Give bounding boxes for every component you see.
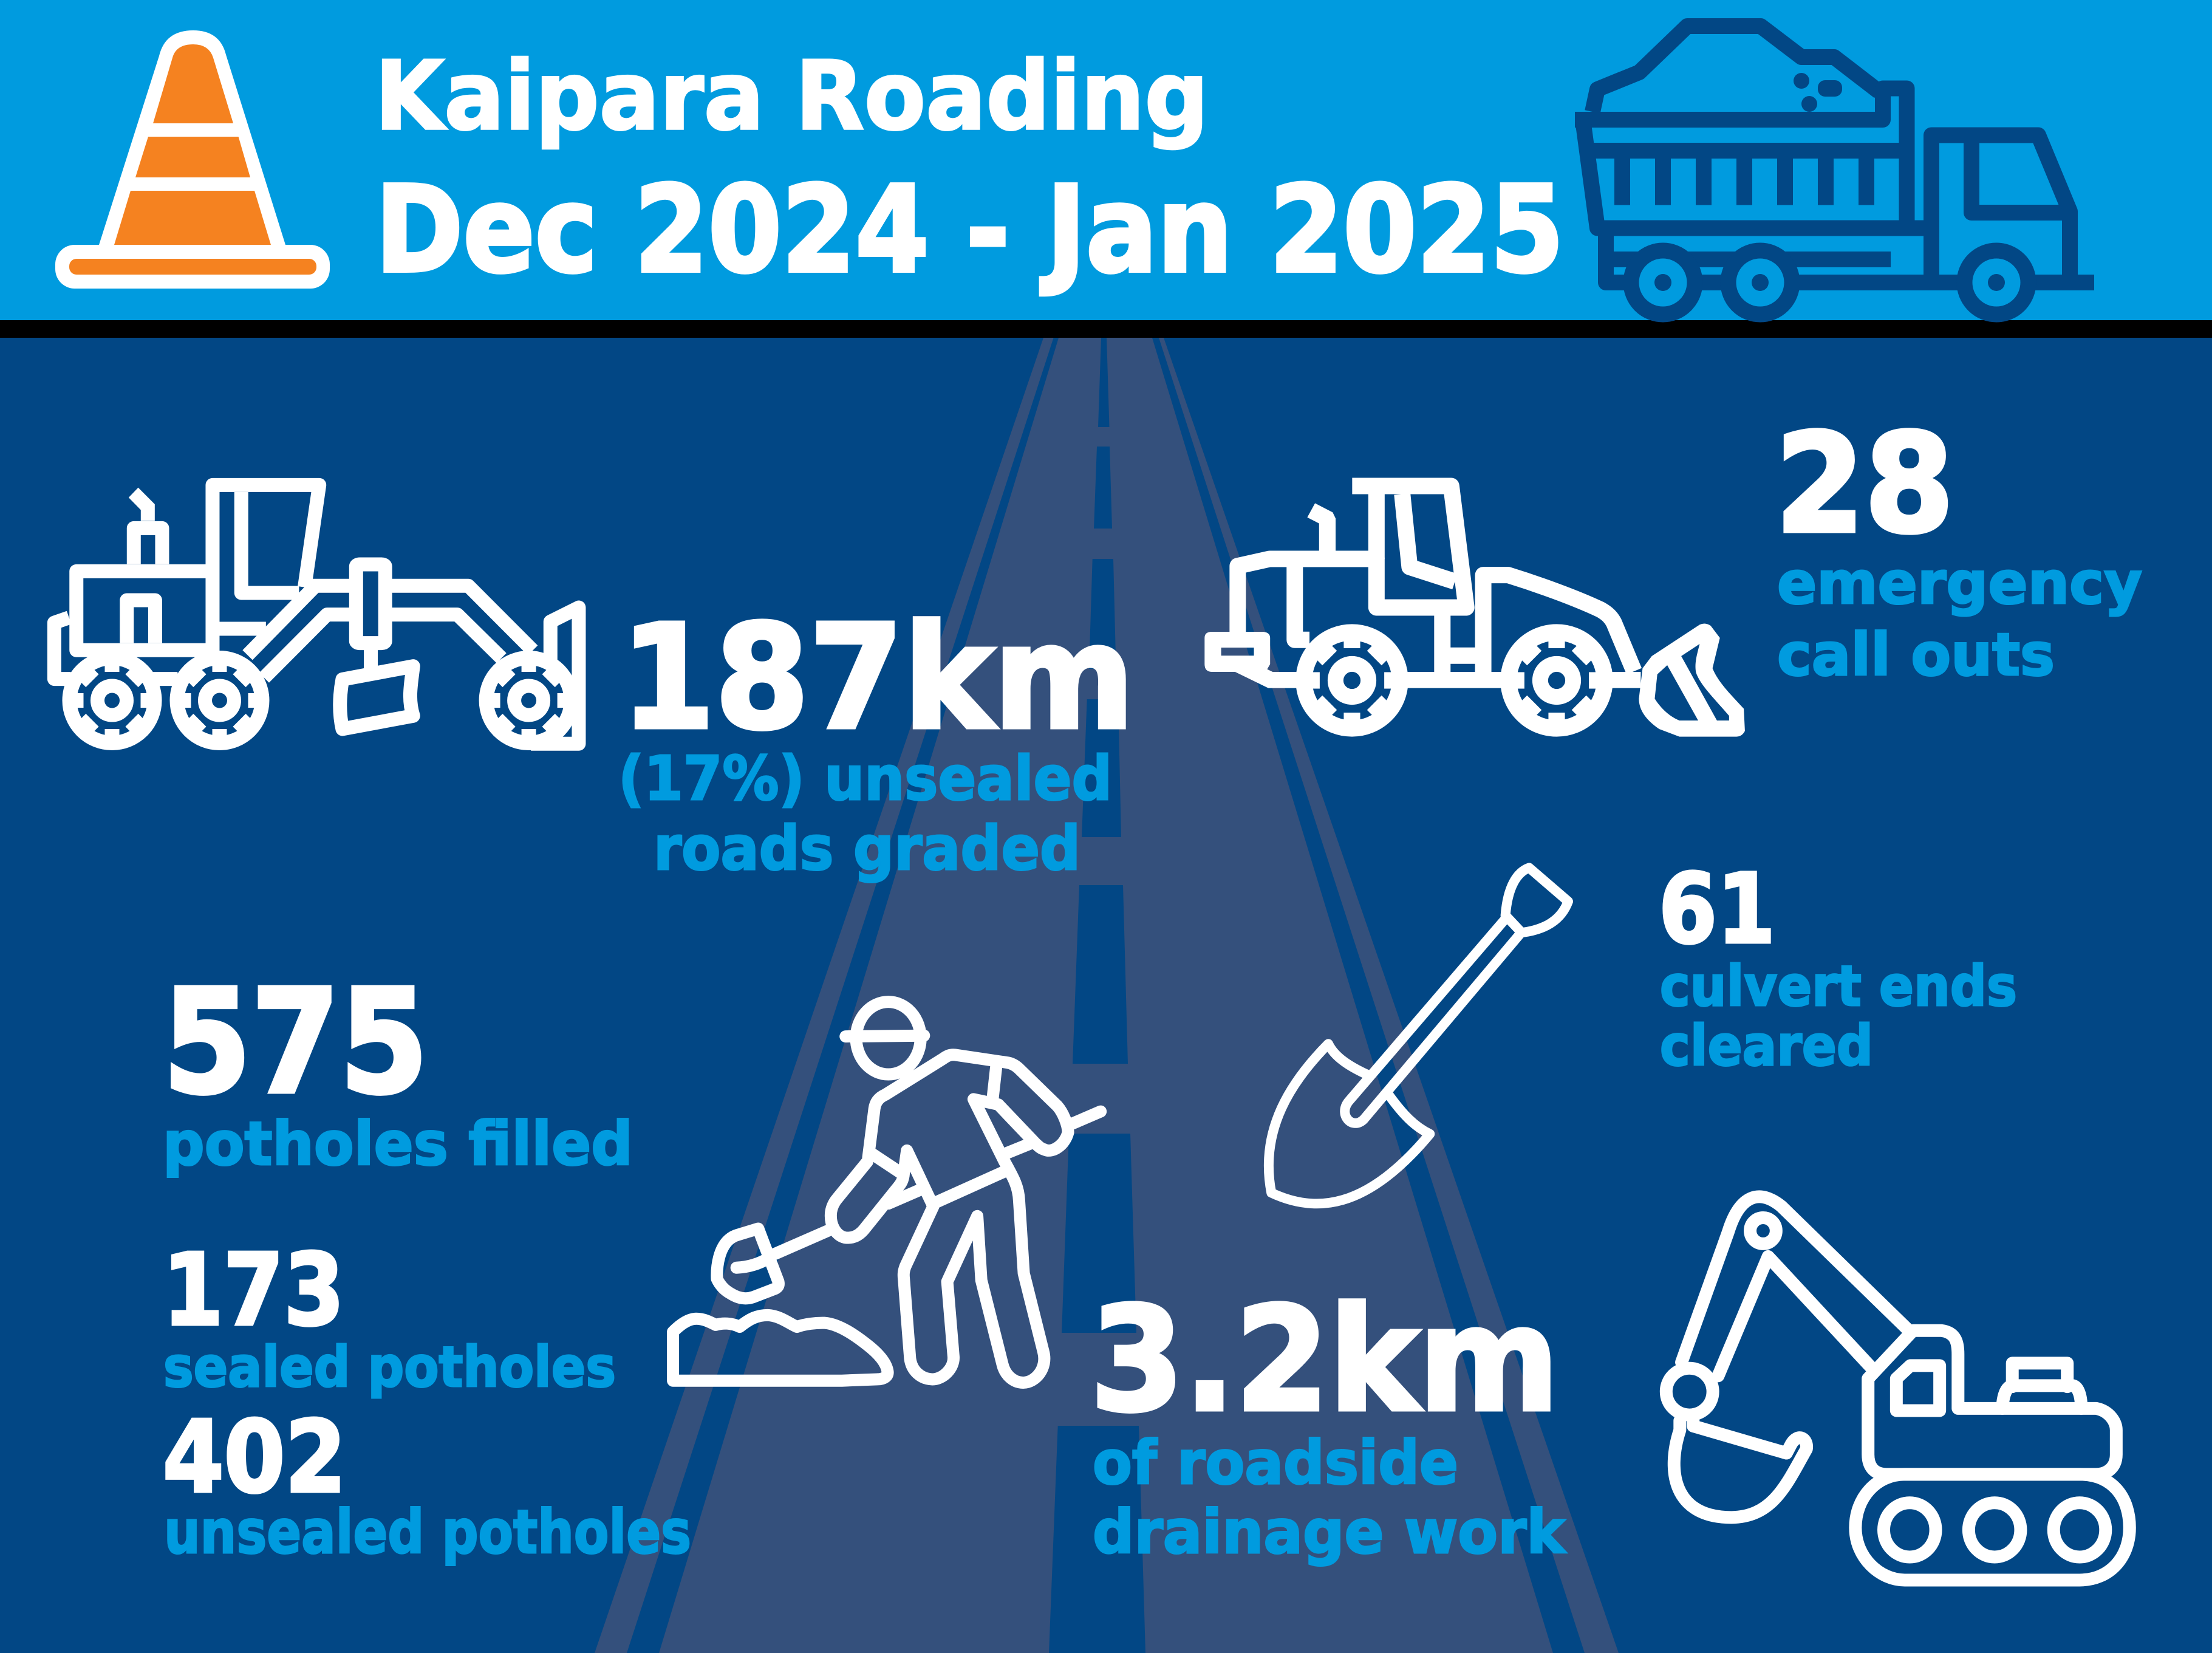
stat: 3.2km roadside drainage work: drainage work xyxy=(1093,1497,1566,1567)
title: Kaipara Roading xyxy=(375,41,1209,151)
icon: shovel xyxy=(1269,868,1568,1203)
stat: 61 culvert ends cleared xyxy=(1659,854,2017,1078)
stat: 187km unsealed roads graded xyxy=(618,594,1135,884)
stat: 575 potholes filled: 575 xyxy=(163,959,428,1126)
stat: 3.2km roadside drainage work: 3.2km xyxy=(1090,1276,1559,1443)
stat: 28 emergency call outs: 28 xyxy=(1775,405,1954,563)
stat: 28 emergency call outs: call outs xyxy=(1777,621,2055,689)
header banner xyxy=(0,0,2212,320)
stat: 187km unsealed roads graded: roads graded xyxy=(654,813,1080,884)
stat: 402 unsealed potholes xyxy=(163,1400,691,1567)
icon: front loader xyxy=(1204,486,1745,737)
stat: 61 culvert ends cleared: 61 xyxy=(1659,854,1775,965)
stat: 28 emergency call outs xyxy=(1775,405,2142,689)
stat: 173 sealed potholes: sealed potholes xyxy=(163,1335,616,1400)
icon: worker shovelling xyxy=(673,1002,1101,1383)
stat: 575 potholes filled: potholes filled xyxy=(163,1109,633,1179)
icon: dump truck xyxy=(1575,26,2094,315)
icon: excavator xyxy=(1666,1197,2129,1580)
stat: 3.2km roadside drainage work: of roadside xyxy=(1093,1428,1458,1498)
stat: 173 sealed potholes xyxy=(163,1233,616,1400)
road graphic xyxy=(595,338,1619,1653)
stat: 3.2km roadside drainage work xyxy=(1090,1276,1566,1567)
stat: 402 unsealed potholes: 402 xyxy=(163,1400,346,1515)
icon: road grader xyxy=(54,485,579,744)
stat: 61 culvert ends cleared: culvert ends xyxy=(1660,954,2017,1019)
stat: 187km unsealed roads graded: (17%) unsealed xyxy=(618,743,1112,814)
stat: 173 sealed potholes: 173 xyxy=(163,1233,344,1348)
road edge black band xyxy=(0,320,2212,338)
title: Dec 2024 - Jan 2025 xyxy=(375,161,1564,299)
stat: 187km unsealed roads graded: 187km xyxy=(621,594,1135,761)
stat: 61 culvert ends cleared: cleared xyxy=(1660,1013,1873,1078)
stat: 402 unsealed potholes: unsealed potholes xyxy=(164,1497,691,1567)
icon: traffic cone xyxy=(55,30,330,289)
stat: 28 emergency call outs: emergency xyxy=(1777,549,2142,617)
stat: 575 potholes filled xyxy=(163,959,633,1179)
title xyxy=(375,41,1564,299)
